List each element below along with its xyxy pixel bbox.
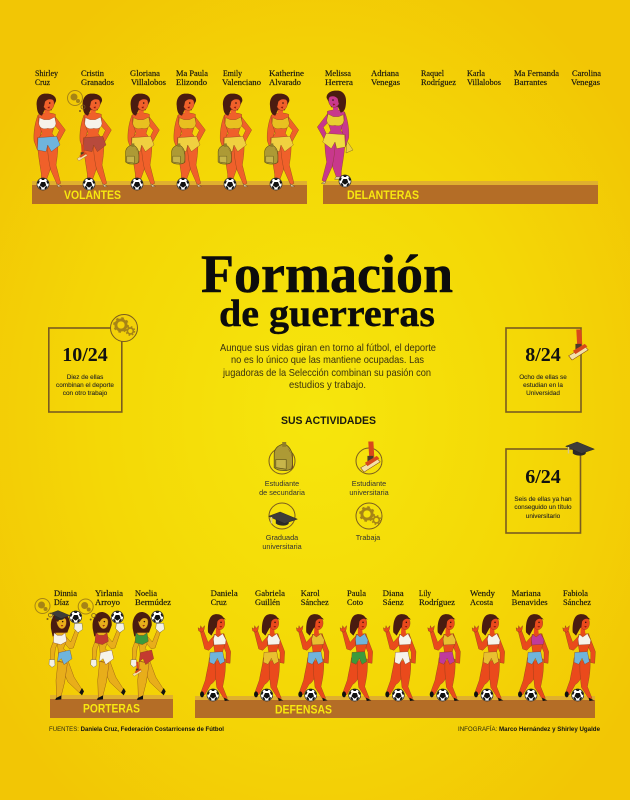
stat: 10/24: Diez de ellas <box>67 374 103 381</box>
volantes names: Villalobos <box>131 77 166 87</box>
porteras names: Dinnia <box>54 588 77 598</box>
volantes names: Cruz <box>35 77 50 87</box>
defensas names: Sánchez <box>563 597 591 607</box>
intro text: no es lo único que las mantiene ocupadas. Las <box>231 355 424 366</box>
delanteras bar <box>323 181 598 204</box>
activity: universitaria: universitaria <box>349 488 390 497</box>
delantera figure <box>317 91 353 187</box>
defensas names: Gabriela <box>255 588 285 598</box>
stat: 8/24: 8/24 <box>525 344 561 366</box>
delanteras names: Barrantes <box>514 77 547 87</box>
porteras names: Bermúdez <box>135 597 171 607</box>
delanteras bar: DELANTERAS <box>347 188 419 202</box>
volantes names: Gloriana <box>130 68 160 78</box>
volantes names: Alvarado <box>269 77 301 87</box>
activities legend <box>259 441 390 551</box>
volantes names: Ma Paula <box>176 68 208 78</box>
stat: 10/24: con otro trabajo <box>63 390 108 397</box>
volantes names: Valenciano <box>222 77 261 87</box>
defensas names: Cruz <box>211 597 227 607</box>
delanteras names: Carolina <box>572 68 601 78</box>
panel: volantes <box>32 68 307 204</box>
porteras names: Noelia <box>135 588 157 598</box>
defensas names: Benavides <box>512 597 548 607</box>
panel: defensas <box>195 588 595 718</box>
activity: secundaria <box>259 442 306 497</box>
defensas names: Coto <box>347 597 363 607</box>
defensas names: Mariana <box>512 588 541 598</box>
stat: 6/24: conseguido un título <box>514 504 572 511</box>
activity: graduada: Graduada <box>266 533 299 542</box>
stat: 8/24: Universidad <box>526 390 560 397</box>
stat: 6/24: Seis de ellas ya han <box>514 496 572 503</box>
volantes names: Emily <box>223 68 243 78</box>
panel: porteras <box>35 588 173 718</box>
porteras names <box>54 588 171 607</box>
activity: universitaria: Estudiante <box>352 479 386 488</box>
icon: book <box>569 329 588 360</box>
delanteras names: Rodríguez <box>421 77 456 87</box>
defensas names: Fabiola <box>563 588 588 598</box>
volantes bar: VOLANTES <box>64 188 121 202</box>
defensas names: Sánchez <box>301 597 329 607</box>
defensas names: Wendy <box>470 588 496 598</box>
stat: 8/24: estudian en la <box>523 382 563 389</box>
footer: sources: FUENTES: Daniela Cruz, Federación Costarricense de Fútbol <box>49 726 224 733</box>
defensas bar <box>195 696 595 718</box>
volantes names: Cristin <box>81 68 105 78</box>
activities heading: SUS ACTIVIDADES <box>281 415 376 427</box>
stat: 10/24 <box>49 314 137 412</box>
delanteras names: Herrera <box>325 77 353 87</box>
activity: secundaria: Estudiante <box>265 479 299 488</box>
icon: cap <box>566 442 594 456</box>
defensas names: Karol <box>301 588 320 598</box>
volantes bar <box>32 181 307 204</box>
title: Formación <box>201 244 453 304</box>
activity: graduada <box>262 503 303 551</box>
volantes names: Granados <box>81 77 114 87</box>
porteras names: Arroyo <box>95 597 120 607</box>
title <box>201 244 453 335</box>
defensas figures <box>198 614 595 701</box>
icon: gears <box>110 314 138 342</box>
volantes names: Elizondo <box>176 77 207 87</box>
stat: 10/24: combinan el deporte <box>56 382 114 389</box>
stat: 8/24: Ocho de ellas se <box>519 374 567 381</box>
defensas names: Paula <box>347 588 366 598</box>
stat: 6/24: universitario <box>526 513 561 520</box>
volantes names <box>35 68 304 87</box>
delanteras names <box>325 68 601 87</box>
intro text: Aunque sus vidas giran en torno al fútbol, el deporte <box>220 343 436 354</box>
intro text: jugadoras de la Selección combinan su pasión con <box>222 368 431 379</box>
intro text <box>220 343 436 391</box>
delanteras names: Venegas <box>571 77 600 87</box>
panel: delanteras <box>317 68 601 204</box>
activity: universitaria <box>349 441 390 497</box>
delanteras names: Raquel <box>421 68 445 78</box>
delanteras names: Ma Fernanda <box>514 68 559 78</box>
delanteras names: Karla <box>467 68 485 78</box>
footer: credits: INFOGRAFÍA: Marco Hernández y Shirley Ugalde <box>458 724 600 733</box>
activity: trabaja: Trabaja <box>356 533 381 542</box>
defensas names: Lily <box>419 588 432 598</box>
title: de guerreras <box>219 293 435 335</box>
stat: 6/24: 6/24 <box>525 466 561 488</box>
intro text: estudios y trabajo. <box>289 380 366 391</box>
defensas names <box>211 588 591 607</box>
porteras figures <box>35 598 166 700</box>
stat: 10/24: 10/24 <box>62 344 108 366</box>
defensas names: Guillén <box>255 597 281 607</box>
defensas names: Daniela <box>211 588 238 598</box>
porteras names: Díaz <box>54 597 69 607</box>
defensas names: Diana <box>383 588 404 598</box>
defensas names: Rodríguez <box>419 597 455 607</box>
volantes names: Shirley <box>35 68 59 78</box>
delanteras names: Melissa <box>325 68 351 78</box>
activity: secundaria: de secundaria <box>259 488 306 497</box>
defensas names: Sáenz <box>383 597 404 607</box>
activity: graduada: universitaria <box>262 542 303 551</box>
delanteras names: Venegas <box>371 77 400 87</box>
defensas names: Acosta <box>470 597 493 607</box>
stat: 6/24 <box>506 442 594 533</box>
delanteras names: Adriana <box>371 68 399 78</box>
porteras bar: PORTERAS <box>83 702 140 716</box>
defensas bar: DEFENSAS <box>275 702 332 716</box>
porteras names: Yirlania <box>95 588 123 598</box>
delanteras names: Villalobos <box>467 77 501 87</box>
volantes figures <box>34 90 299 190</box>
volantes names: Katherine <box>269 68 304 78</box>
stat: 8/24 <box>506 328 588 412</box>
